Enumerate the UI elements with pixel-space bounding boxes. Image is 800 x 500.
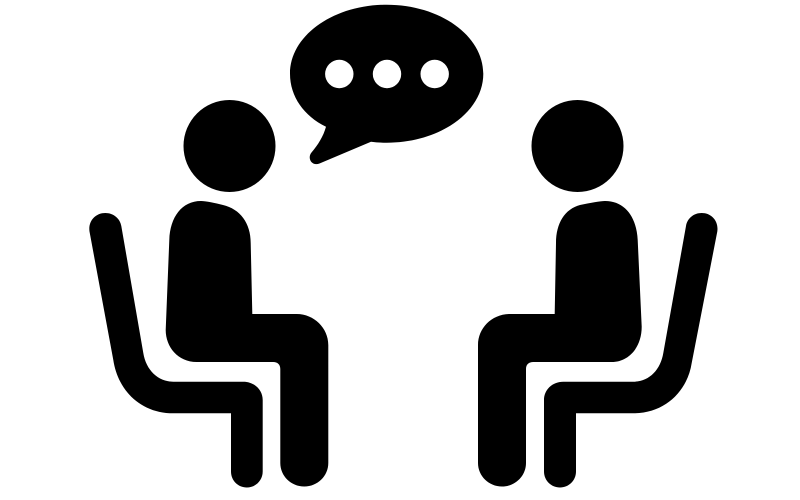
chair bbox=[544, 213, 717, 488]
head bbox=[532, 100, 624, 192]
dots bbox=[325, 60, 449, 88]
person: right bbox=[478, 100, 717, 488]
speech bubble with ellipsis bbox=[290, 5, 483, 164]
head bbox=[184, 100, 276, 192]
person: left bbox=[89, 100, 328, 488]
body and leg bbox=[478, 201, 642, 486]
chair bbox=[89, 213, 263, 488]
body and leg bbox=[166, 201, 328, 486]
bubble shape bbox=[290, 5, 483, 164]
